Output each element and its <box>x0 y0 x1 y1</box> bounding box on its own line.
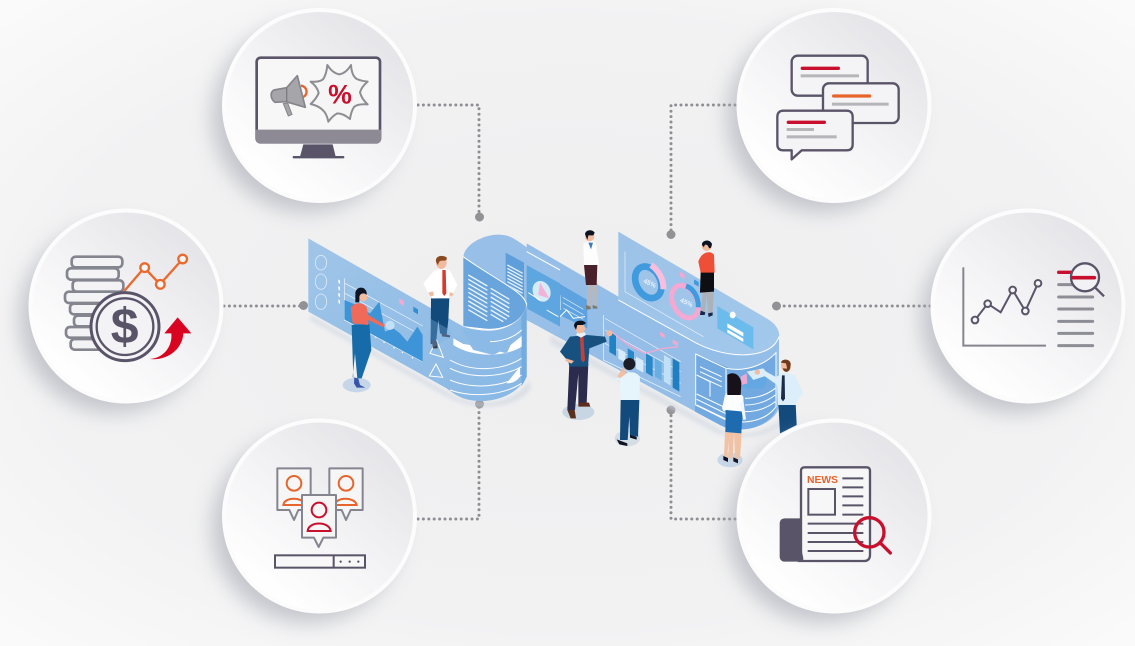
white stepped charts <box>450 358 522 395</box>
front fold shade <box>463 303 526 377</box>
icon: chat bubbles <box>777 56 899 159</box>
icon: coins, dollar and trend <box>65 255 191 361</box>
icon: profile bubbles and search bar <box>275 468 365 568</box>
pie sketch on cap wall <box>740 368 770 388</box>
news label: NEWS <box>807 475 838 486</box>
user card panel <box>717 306 753 349</box>
ribbon face table panel <box>533 265 555 320</box>
chart axes <box>625 252 703 337</box>
panel tint over man's legs <box>430 318 452 348</box>
disc: promotion monitor <box>212 8 417 212</box>
cylinder inner wall <box>463 257 527 329</box>
person: woman in red top <box>698 240 715 317</box>
area chart <box>338 278 423 362</box>
central isometric illustration: right ribbon <box>527 232 783 437</box>
person: bearded man <box>755 360 803 433</box>
person: woman with blue skirt <box>717 373 746 467</box>
legend chips <box>399 298 404 306</box>
person: woman in white blouse <box>583 230 599 309</box>
cylinder table <box>506 253 524 303</box>
dotted connectors <box>224 105 930 519</box>
right edge strip <box>521 303 527 386</box>
disc: customer comments <box>727 8 932 212</box>
wall text lines <box>468 275 509 322</box>
connector end dots <box>299 212 781 414</box>
ground shadow <box>550 335 783 437</box>
central isometric illustration: left ribbon <box>308 235 560 407</box>
disc: analytics report <box>921 208 1126 413</box>
ribbon body <box>527 243 779 429</box>
donut chart 1: 45% <box>642 278 657 290</box>
icon: line chart with magnified list <box>963 263 1104 346</box>
disc: revenue growth <box>19 208 224 413</box>
three outline blobs <box>315 255 327 309</box>
donut chart 2 <box>666 281 704 323</box>
donut chart 1 <box>630 262 667 303</box>
triangle outlines <box>429 340 443 377</box>
wall white lines <box>696 353 776 422</box>
ground shadow under left ribbon <box>310 315 530 407</box>
cylinder pie panel <box>527 265 560 327</box>
discount percent sign: % <box>328 80 352 110</box>
left panel <box>308 238 527 401</box>
disc: news monitoring <box>727 418 932 623</box>
bar chart on ribbon <box>603 315 681 397</box>
icon: newspaper with magnifier <box>780 467 890 562</box>
icon: monitor with megaphone and discount <box>256 58 381 158</box>
cylinder back surface <box>463 235 560 337</box>
upper display panel <box>618 232 779 355</box>
person: man from behind <box>613 358 640 446</box>
donut chart 2: 45% <box>679 297 694 309</box>
small line chart panel <box>556 282 587 328</box>
disc: audience profiles <box>212 418 417 623</box>
person: man in white shirt <box>423 256 457 348</box>
dollar sign: $ <box>111 299 139 355</box>
end cap wall <box>695 352 777 429</box>
central people group <box>560 230 803 467</box>
legend chips <box>680 272 685 279</box>
person: woman in red <box>343 288 395 392</box>
person: man in blue jacket <box>560 321 612 420</box>
